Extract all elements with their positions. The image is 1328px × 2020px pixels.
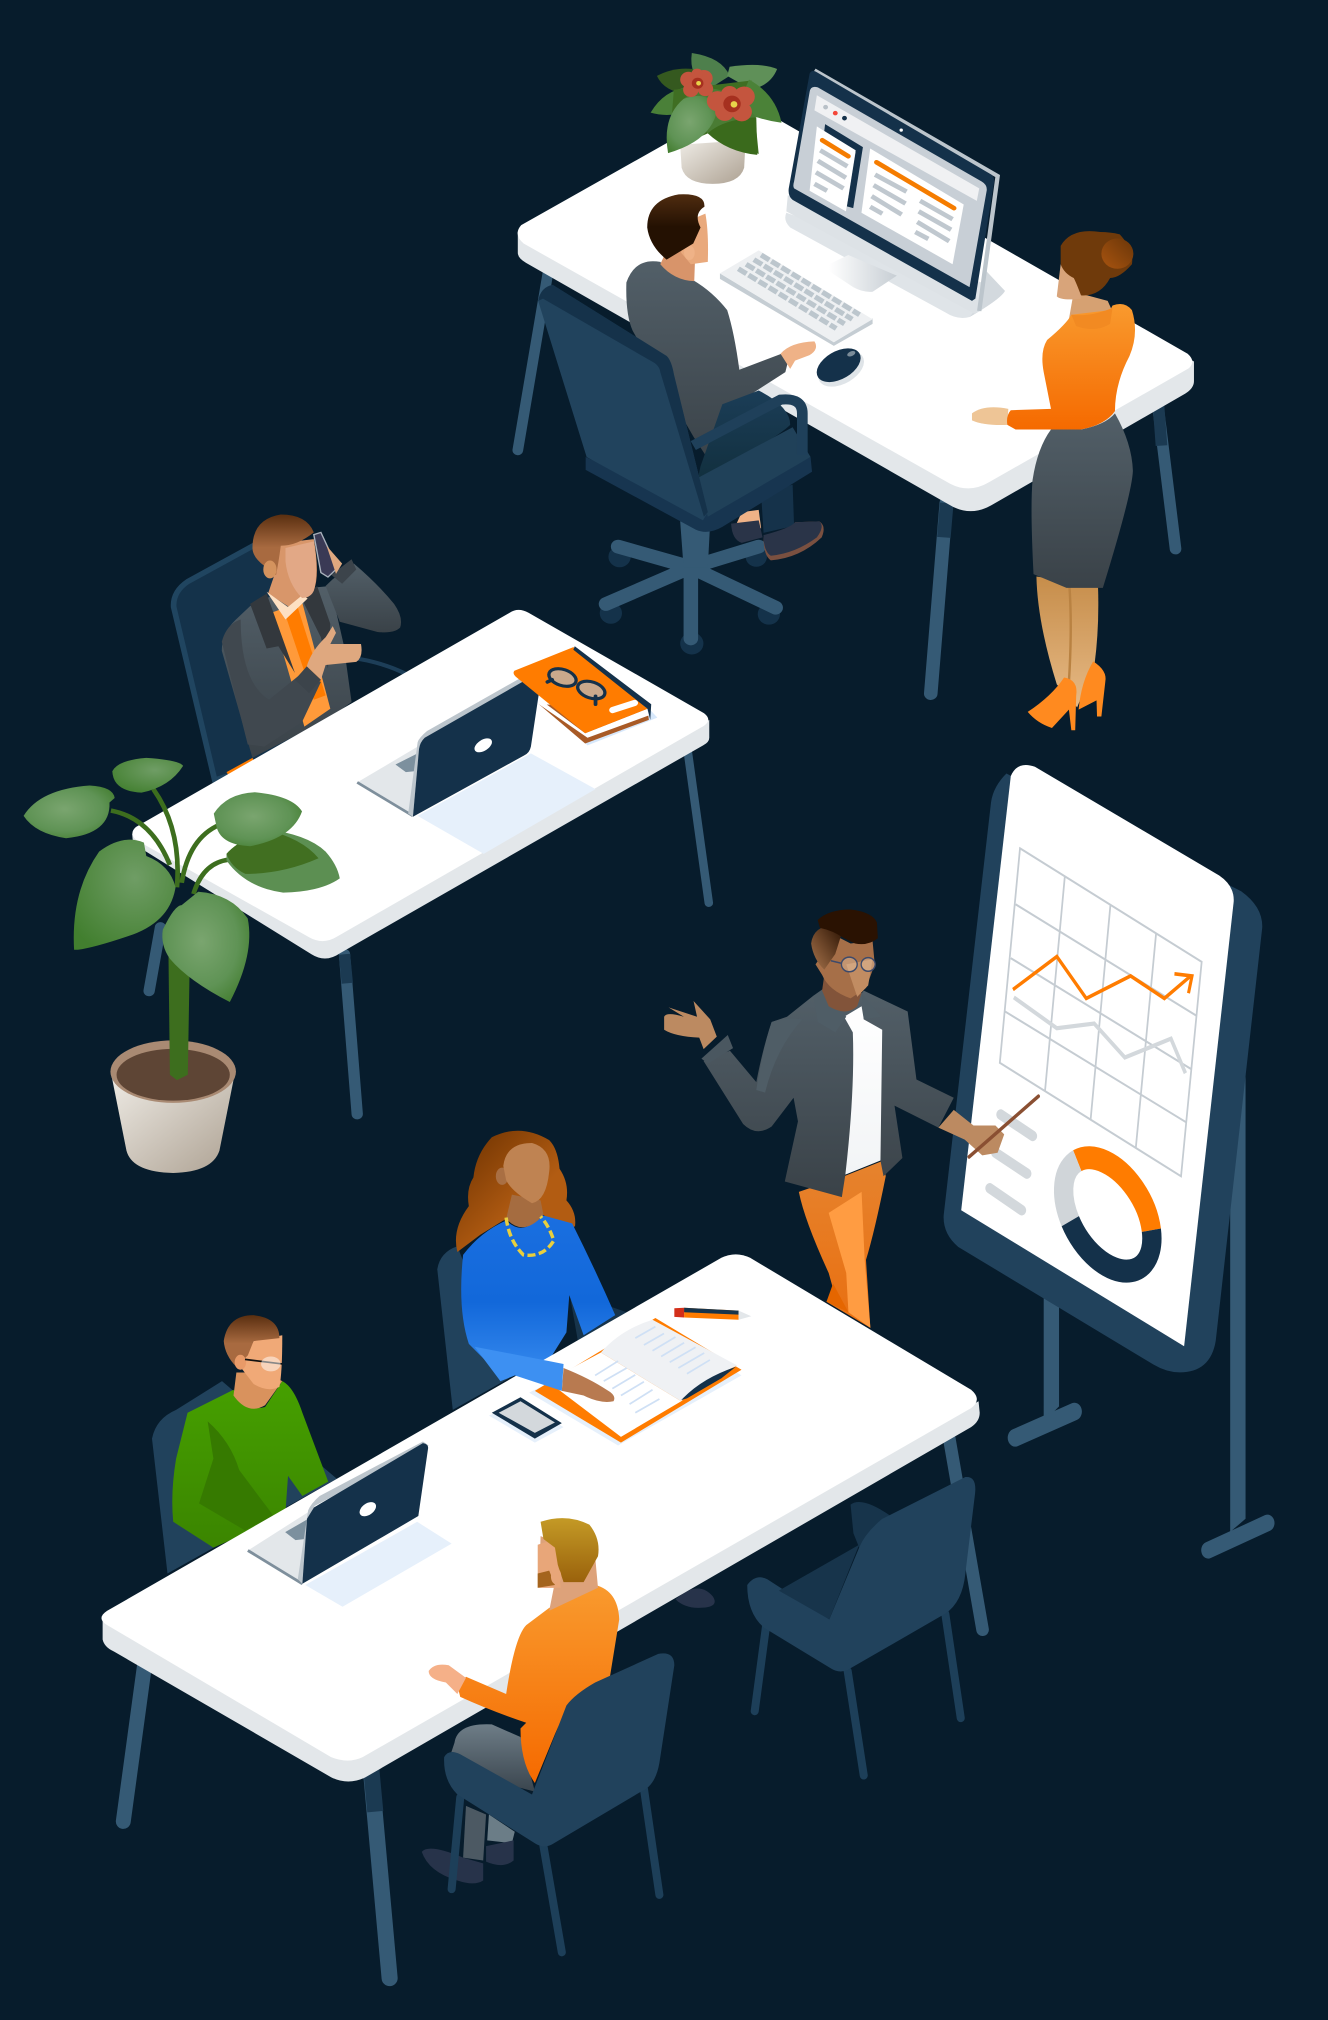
- board sheet: [961, 765, 1234, 1346]
- scene: top desk group: [518, 53, 1194, 730]
- desk tabletop: [132, 610, 709, 959]
- man in orange sweater: legs: [422, 1724, 535, 1883]
- monitor: [785, 70, 1005, 318]
- chair of man in green: [152, 1381, 337, 1573]
- seated man: legs and shoes: [731, 485, 824, 560]
- scene: middle desk group: [24, 515, 709, 1173]
- woman in blue: [456, 1131, 615, 1390]
- office chair base: [600, 521, 780, 655]
- phone man: [222, 515, 401, 758]
- board stand: [1015, 1074, 1267, 1550]
- sleeve and hand of woman in blue: [475, 1347, 614, 1402]
- donut chart: [1046, 1138, 1170, 1291]
- table legs: [123, 1439, 983, 1978]
- laptop: [248, 1441, 452, 1607]
- scene: presentation board group: [664, 765, 1267, 1550]
- tablet: [489, 1397, 564, 1443]
- line chart: [1000, 848, 1202, 1176]
- hidden shoe under table: [675, 1588, 715, 1608]
- chair of man in orange: [444, 1653, 674, 1952]
- laptop: [357, 669, 596, 854]
- office chair back and seat: [538, 285, 812, 532]
- desk tabletop: [518, 102, 1194, 511]
- scene: meeting table group: [101, 1131, 983, 1978]
- table top: [101, 1254, 980, 1782]
- man in orange sweater: torso and head: [429, 1518, 619, 1783]
- keyboard: [720, 250, 873, 346]
- desk legs: [518, 273, 1176, 694]
- floor plant: [24, 758, 340, 1173]
- pencil: [674, 1308, 751, 1320]
- presenter: [664, 910, 1038, 1328]
- board frame: [944, 774, 1262, 1372]
- open book: [529, 1318, 741, 1445]
- desk legs: [149, 753, 709, 1114]
- mouse: [810, 341, 871, 394]
- chair of woman in blue: [437, 1246, 627, 1410]
- seated man: torso and head: [626, 194, 816, 478]
- text placeholder bars: [990, 1115, 1033, 1210]
- empty chair: [747, 1477, 975, 1776]
- potted flower: [651, 53, 781, 184]
- phone man chair: [174, 544, 406, 780]
- standing woman: [972, 231, 1135, 730]
- notebook with glasses: [514, 646, 657, 745]
- man in green sweater: [172, 1315, 328, 1548]
